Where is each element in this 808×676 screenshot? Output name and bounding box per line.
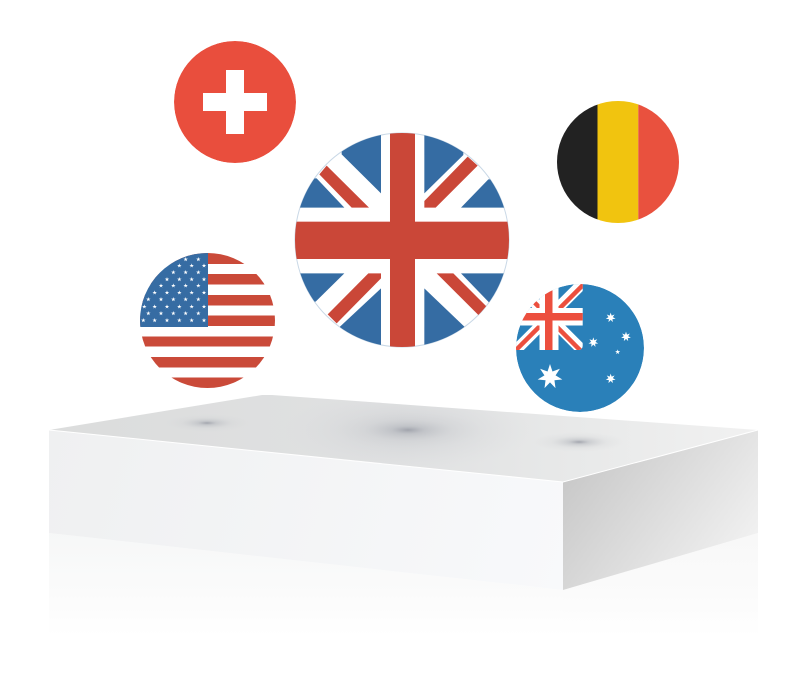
- shadow halo: united kingdom flag: [374, 414, 454, 446]
- flag: belgium: [557, 100, 680, 224]
- flag: united states: [138, 252, 278, 390]
- flag: australia: [516, 284, 644, 412]
- flag: switzerland: [174, 41, 296, 163]
- platform reflection: [49, 533, 758, 636]
- flags group: [138, 41, 680, 412]
- shadow: united states flag: [187, 418, 227, 428]
- platform top face: [49, 395, 758, 482]
- flag: united kingdom: [292, 128, 515, 355]
- shadow: australia flag: [554, 436, 604, 448]
- platform box: [49, 395, 758, 590]
- platform front face: [49, 430, 563, 590]
- shadows on the platform top: [187, 413, 604, 448]
- shadow: united kingdom flag: [378, 423, 440, 437]
- platform right face: [563, 430, 758, 590]
- union jack canton: [516, 284, 583, 350]
- southern cross stars: [538, 313, 631, 388]
